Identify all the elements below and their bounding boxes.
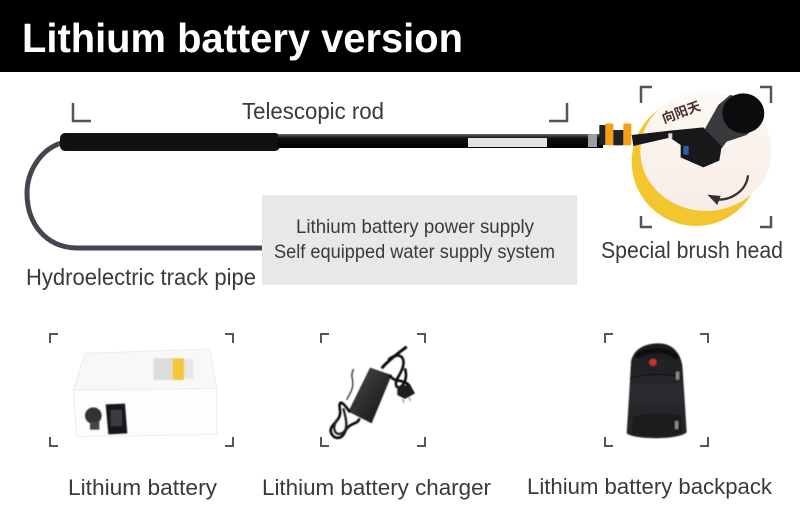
yellow bristle rim [632,97,760,226]
brush head corner marks [641,87,771,227]
label: lithium battery backpack: Lithium battery backpack [527,474,773,499]
rod corner marks [73,103,567,121]
title banner [0,0,800,72]
label: telescopic rod: Telescopic rod [242,98,384,124]
label: lithium battery charger: Lithium battery charger [262,475,491,500]
mount and hub [632,127,722,167]
panel: power and water supply: Self equipped water supply system [274,241,555,263]
motor housing [703,95,763,148]
title banner: Lithium battery version [22,15,463,61]
charger corner marks [321,334,425,446]
icon: special brush head [599,91,772,226]
battery corner marks [50,334,233,446]
brand logo: 向阳天 [660,97,703,126]
icon: lithium battery [73,349,217,437]
icon: backpack [627,343,687,438]
hydroelectric track pipe [27,143,262,248]
rotation arrow [714,175,748,200]
label: lithium battery: Lithium battery [68,475,217,500]
panel: power and water supply [262,195,577,285]
icon: battery charger [331,347,415,438]
label: special brush head: Special brush head [601,237,783,263]
telescopic rod [60,133,603,151]
panel: power and water supply: Lithium battery power supply [296,216,534,238]
label: hydroelectric track pipe: Hydroelectric track pipe [26,264,256,290]
backpack corner marks [605,334,708,446]
orange clamps [605,123,613,145]
white disc [640,91,772,211]
